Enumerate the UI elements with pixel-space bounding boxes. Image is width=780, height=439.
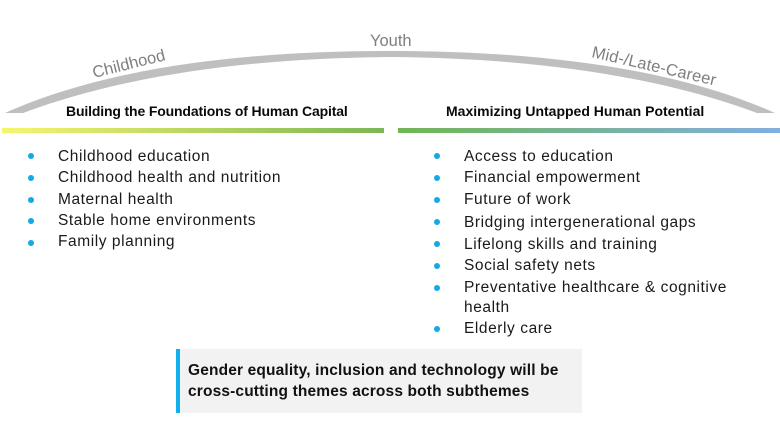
gradient bar: right (398, 128, 780, 133)
list: right: Bridging intergenerational gaps (464, 214, 696, 231)
arc with life stage labels (5, 32, 775, 113)
list: right: Elderly care (464, 320, 553, 337)
list: left: Childhood health and nutrition (58, 169, 281, 186)
list: right: Financial empowerment (464, 169, 641, 186)
list: right: Preventative healthcare & cognitive (464, 279, 727, 296)
list: left (28, 148, 281, 250)
list: right: Access to education (464, 148, 614, 165)
label: Childhood: Childhood (91, 46, 167, 82)
list: left: Family planning (58, 233, 175, 250)
callout: cross-cutting themes: Gender equality, inclusion and technology will be (188, 362, 559, 379)
heading: right subtheme: Maximizing Untapped Human Potential (446, 103, 704, 119)
list: left: Stable home environments (58, 212, 256, 229)
list: left: Childhood education (58, 148, 210, 165)
label: Mid-/Late-Career: Mid-/Late-Career (590, 43, 718, 90)
list: right (434, 148, 727, 337)
heading: left subtheme: Building the Foundations of Human Capital (66, 103, 348, 119)
list: right: health (464, 299, 510, 316)
label: Youth: Youth (370, 32, 412, 50)
callout: cross-cutting themes (176, 349, 582, 413)
callout: cross-cutting themes: cross-cutting themes across both subthemes (188, 383, 529, 400)
list: right: Lifelong skills and training (464, 236, 657, 253)
list: right: Social safety nets (464, 257, 596, 274)
list: right: Future of work (464, 191, 571, 208)
gradient bar: left (2, 128, 384, 133)
list: left: Maternal health (58, 191, 173, 208)
